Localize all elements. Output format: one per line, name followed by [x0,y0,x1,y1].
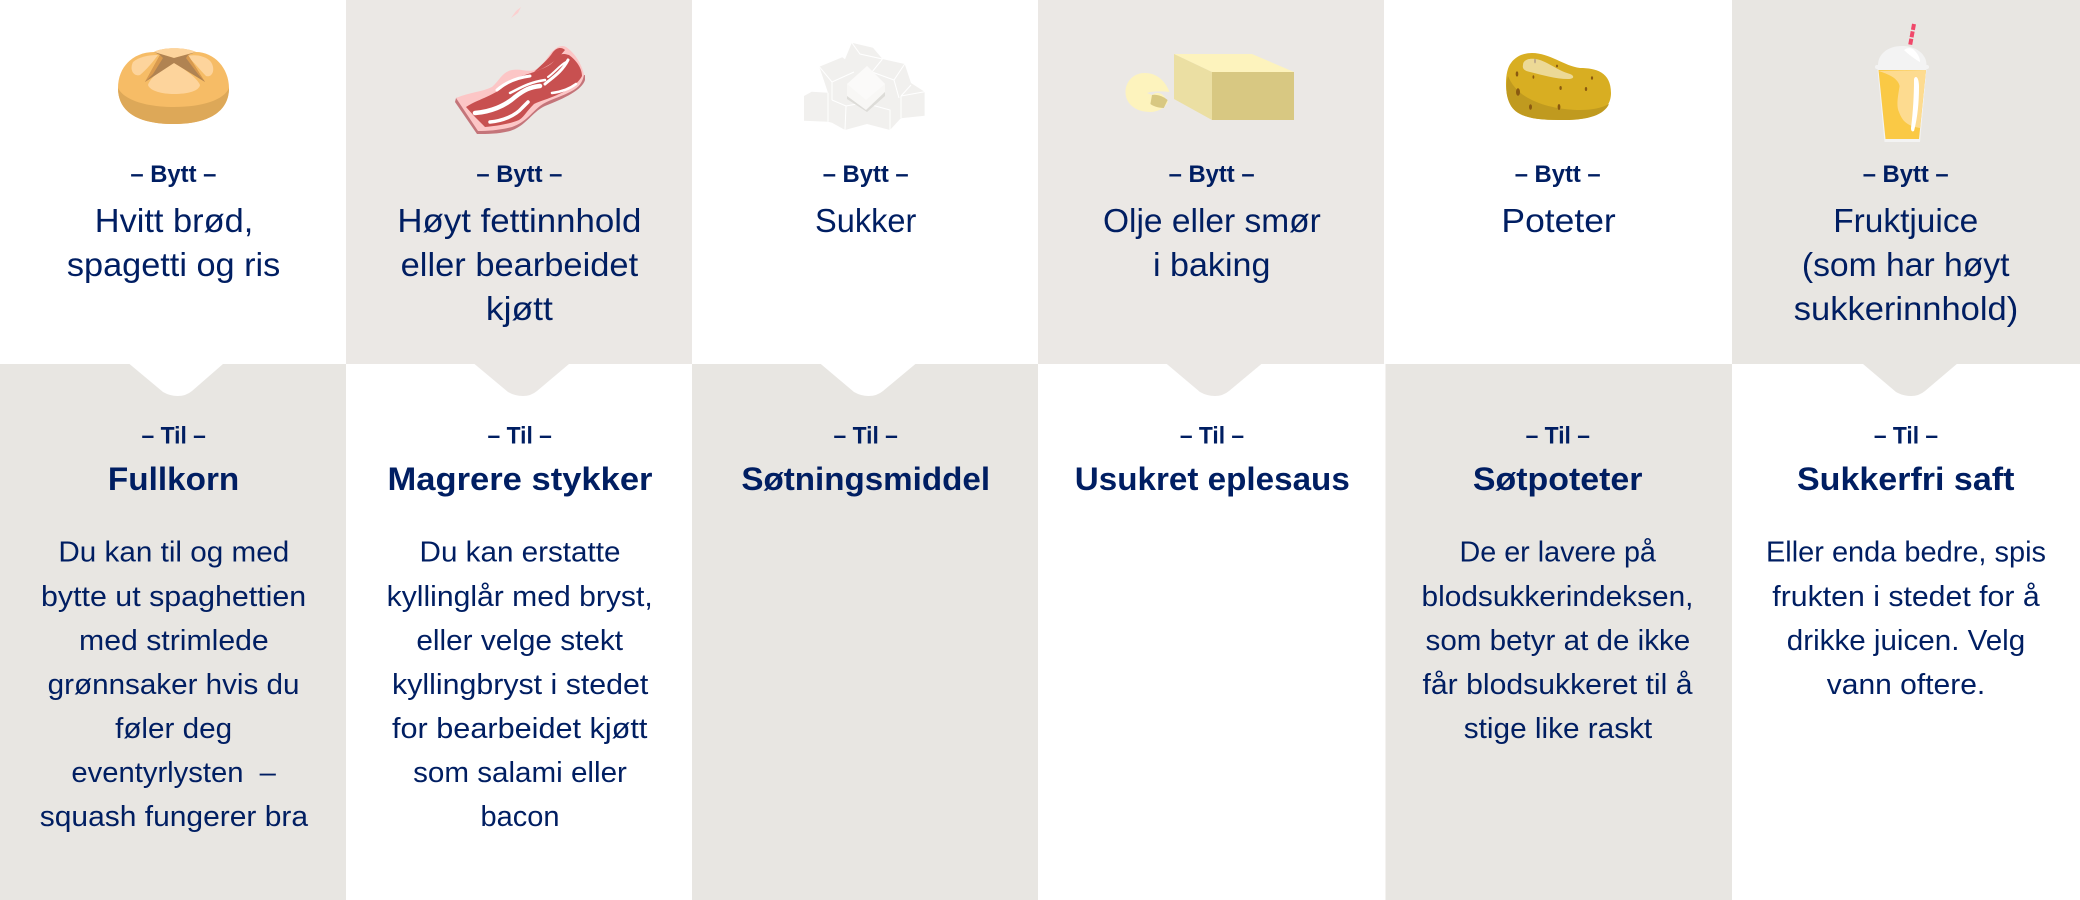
panel: swap to, leaner cuts [346,364,692,900]
column 6: fruit juice to sugar-free squash [1732,0,2080,900]
body text: squash fungerer bra [40,801,308,833]
heading: Sukkerfri saft: Sukkerfri saft [1797,461,2015,497]
body text: som betyr at de ikke [1426,625,1690,657]
swap-from text: Olje eller smør [1103,203,1321,240]
heading: Søtpoteter: Søtpoteter [1473,461,1643,497]
swap-from text: sukkerinnhold) [1794,291,2018,328]
body text: Eller enda bedre, spis [1766,537,2046,569]
label: Til: – Til – [1526,422,1590,450]
label: Bytt: – Bytt – [1863,161,1949,188]
body text: vann oftere. [1827,669,1985,701]
swap-from text: i baking [1153,247,1270,284]
icon: potato [1506,53,1611,120]
column 3: sugar to sweetener [692,0,1038,900]
icon: juice cup with straw [1875,24,1929,142]
column 4: oil or butter to applesauce [1038,0,1386,900]
panel: swap from, sugar [692,0,1038,364]
label: Bytt: – Bytt – [130,161,216,188]
label: Til: – Til – [1874,422,1938,450]
column 1: bread to whole grain [0,0,346,900]
swap-from text [397,203,641,328]
label: Bytt: – Bytt – [1515,161,1601,188]
body text: for bearbeidet kjøtt [392,713,647,745]
icon: bacon [455,7,585,134]
icon: sugar cubes [804,43,925,130]
heading: Magrere stykker: Magrere stykker [388,461,653,497]
panel: swap from, bread [0,0,346,364]
heading: Usukret eplesaus: Usukret eplesaus [1075,461,1350,497]
panel: swap from, meat [346,0,692,364]
body text [387,537,653,833]
swap-from text [1103,203,1321,284]
icon: butter block with curl [1126,54,1294,120]
panel: swap from, fruit juice [1732,0,2080,364]
heading: Søtningsmiddel: Søtningsmiddel [741,461,990,497]
label: Bytt: – Bytt – [823,161,909,188]
panel: swap to, sweet potatoes [1386,364,1732,900]
body text: eller velge stekt [416,625,623,657]
label: Til: – Til – [834,422,898,450]
swap-from text: Sukker [815,203,916,240]
swap-from text: Høyt fettinnhold [397,203,641,240]
body text: De er lavere på [1460,537,1656,569]
body text: får blodsukkeret til å [1422,669,1693,701]
body text: eventyrlysten – [71,757,276,789]
heading: Fullkorn: Fullkorn [108,461,239,497]
panel: swap to, sugar-free squash [1732,364,2080,900]
body text: bacon [480,801,560,833]
label: Til: – Til – [142,422,206,450]
panel: swap from, potatoes [1384,0,1732,364]
swap-from text [67,203,280,284]
swap-from text: Fruktjuice [1833,203,1978,240]
swap-from text: Hvitt brød, [95,203,253,240]
body text: blodsukkerindeksen, [1422,581,1693,613]
panel: swap to, whole grain [0,364,346,900]
body text [1422,537,1693,745]
body text: frukten i stedet for å [1772,581,2040,613]
panel: swap to, sweetener [692,364,1038,900]
label: Bytt: – Bytt – [1169,161,1255,188]
body text: drikke juicen. Velg [1787,625,2025,657]
swap-from text: eller bearbeidet [401,247,639,284]
body text: føler deg [115,713,232,745]
body text [1766,537,2046,701]
body text: stige like raskt [1464,713,1652,745]
swap-from text [1794,203,2018,328]
body text: bytte ut spaghettien [41,581,306,613]
column 5: potatoes to sweet potatoes [1384,0,1732,900]
swap-from text: Poteter [1501,203,1616,240]
panel: swap to, applesauce [1038,364,1386,900]
label: Til: – Til – [1180,422,1244,450]
body text: Du kan til og med [58,537,289,569]
body text: med strimlede [79,625,269,657]
body text: som salami eller [413,757,627,789]
body text [40,537,308,833]
label: Til: – Til – [488,422,552,450]
swap-from text: spagetti og ris [67,247,280,284]
body text: grønnsaker hvis du [48,669,300,701]
body text: kyllinglår med bryst, [387,581,653,613]
label: Bytt: – Bytt – [476,161,562,188]
swap-from text: kjøtt [486,291,554,328]
panel: swap from, oil or butter [1038,0,1384,364]
swap-from text: (som har høyt [1802,247,2010,284]
body text: Du kan erstatte [420,537,620,569]
column 2: fatty meat to leaner cuts [346,0,692,900]
icon: bread roll [118,48,229,124]
body text: kyllingbryst i stedet [392,669,648,701]
